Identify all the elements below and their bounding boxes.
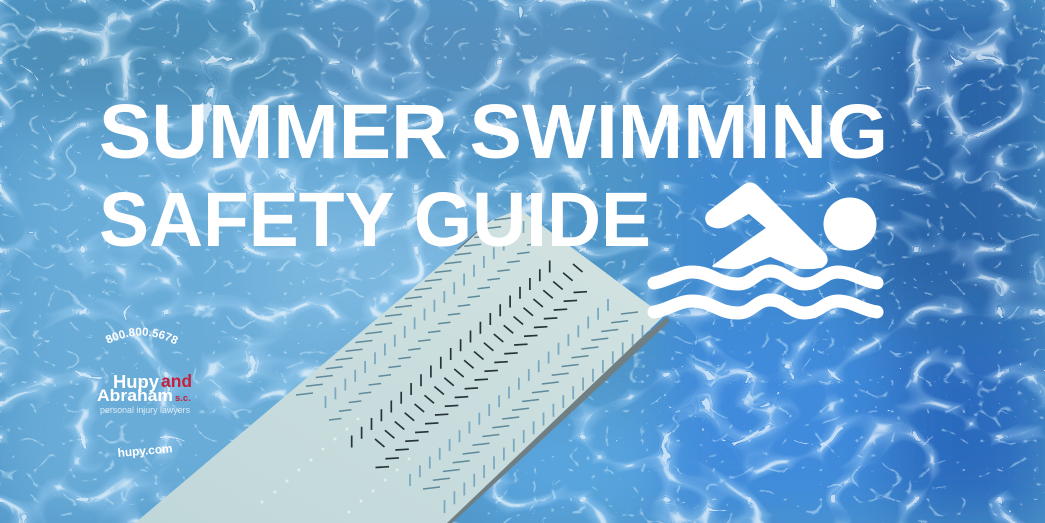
title line 1: SUMMER SWIMMING <box>99 89 888 175</box>
phone number arc guide <box>108 336 183 349</box>
title <box>99 89 888 263</box>
tagline: personal injury lawyers <box>100 405 190 416</box>
swimmer body <box>706 183 827 268</box>
board dots <box>260 418 410 514</box>
swimmer waves <box>654 271 877 313</box>
logo: Abraham: Abraham <box>97 386 173 405</box>
diving board <box>135 209 669 523</box>
icon: swimmer <box>654 183 877 313</box>
swimmer head <box>824 198 876 250</box>
board lower edge <box>440 316 669 523</box>
logo: s.c.: s.c. <box>175 393 191 404</box>
board deck <box>135 209 664 523</box>
phone number: 800.800.5678 <box>106 328 178 344</box>
logo: and: and <box>161 371 192 391</box>
logo: Hupy: Hupy <box>113 371 160 392</box>
board slats <box>296 218 642 513</box>
website: hupy.com <box>117 441 173 460</box>
logo block <box>97 328 192 460</box>
board upper edge <box>457 220 494 252</box>
title line 2: SAFETY GUIDE <box>99 177 651 263</box>
